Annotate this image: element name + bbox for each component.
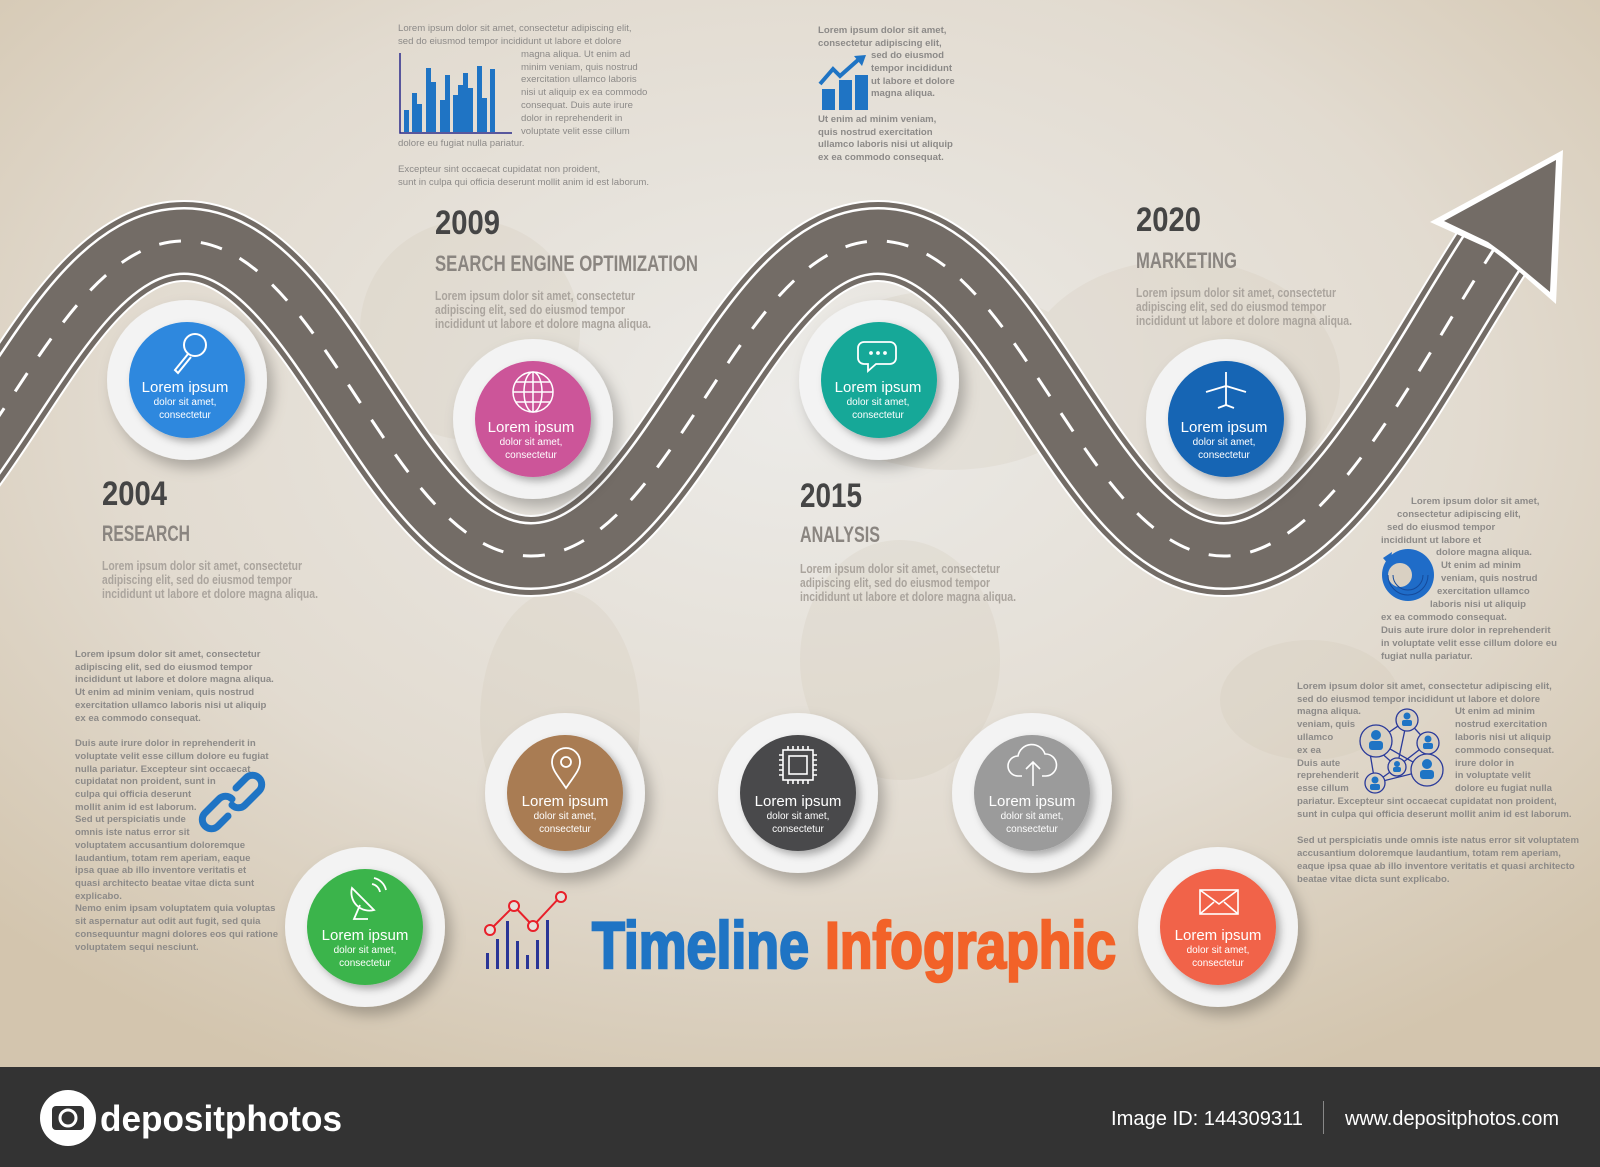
text block: right with pie icon: consectetur adipiscing elit, xyxy=(1397,509,1521,520)
circle: brown location: Lorem ipsum xyxy=(522,793,608,810)
text block: right lower with network icon: sunt in culpa qui officia deserunt mollit anim id est laborum. xyxy=(1297,809,1572,820)
text block: left lower with chain icon: voluptatem accusantium doloremque xyxy=(75,840,245,851)
circle: orange mail xyxy=(1138,847,1298,1007)
text block: top right with growth icon: Lorem ipsum dolor sit amet, xyxy=(818,25,947,36)
text block: left lower with chain icon: Nemo enim ipsam voluptatem quia voluptas xyxy=(75,903,275,914)
text block: top with bar chart xyxy=(398,23,649,188)
text block: right with pie icon: sed do eiusmod tempor xyxy=(1387,522,1495,533)
circle: teal analysis xyxy=(799,300,959,460)
text block: right with pie icon: Duis aute irure dolor in reprehenderit xyxy=(1381,625,1551,636)
circle: pink seo: consectetur xyxy=(505,450,558,461)
text block: right lower with network icon: dolore eu fugiat nulla xyxy=(1455,783,1553,794)
text block: left lower with chain icon: adipiscing elit, sed do eiusmod tempor xyxy=(75,662,253,673)
circle: dark chip: Lorem ipsum xyxy=(755,793,841,810)
icon: chain link xyxy=(202,775,262,829)
circle: teal analysis: dolor sit amet, xyxy=(847,397,909,408)
icon: satellite dish xyxy=(351,878,386,919)
text block: top right with growth icon: tempor incididunt xyxy=(871,63,953,74)
icon: bar chart xyxy=(400,53,512,133)
text block: top with bar chart: consequat. Duis aute irure xyxy=(521,100,633,111)
icon: chip xyxy=(779,746,817,784)
text block: top with bar chart: exercitation ullamco laboris xyxy=(521,74,637,85)
text block: right lower with network icon: Sed ut perspiciatis unde omnis iste natus error sit voluptatem xyxy=(1297,835,1579,846)
text block: right lower with network icon: beatae vitae dicta sunt explicabo. xyxy=(1297,874,1450,885)
text block: right lower with network icon: accusantium doloremque laudantium, totam rem aperiam, xyxy=(1297,848,1561,859)
text block: left lower with chain icon: consequuntur magni dolores eos qui ratione xyxy=(75,929,278,940)
milestone 2020 text: MARKETING xyxy=(1136,248,1237,273)
circle: dark chip xyxy=(718,713,878,873)
icon: network xyxy=(1360,709,1443,793)
text block: left lower with chain icon: ex ea commodo consequat. xyxy=(75,713,201,724)
text block: right with pie icon: exercitation ullamco xyxy=(1437,586,1530,597)
text block: right lower with network icon xyxy=(1297,681,1579,885)
milestone 2004 text: 2004 xyxy=(102,475,167,513)
milestone 2004 text: incididunt ut labore et dolore magna aliqua. xyxy=(102,587,318,601)
text block: top with bar chart: Excepteur sint occaecat cupidatat non proident, xyxy=(398,164,600,175)
circle: dark chip: dolor sit amet, xyxy=(767,811,829,822)
text block: left lower with chain icon: incididunt ut labore et dolore magna aliqua. xyxy=(75,674,274,685)
text block: left lower with chain icon: sit aspernatur aut odit aut fugit, sed quia xyxy=(75,916,261,927)
circle: green satellite xyxy=(285,847,445,1007)
milestone 2004 text: RESEARCH xyxy=(102,521,190,546)
circle: green satellite: consectetur xyxy=(339,958,392,969)
circle: orange mail: consectetur xyxy=(1192,958,1245,969)
text block: left lower with chain icon: laudantium, totam rem aperiam, eaque xyxy=(75,853,250,864)
text block: top right with growth icon: ut labore et dolore xyxy=(871,76,955,87)
text block: top right with growth icon: ullamco laboris nisi ut aliquip xyxy=(818,139,953,150)
circle: teal analysis: consectetur xyxy=(852,410,905,421)
text block: left lower with chain icon: Ut enim ad minim veniam, quis nostrud xyxy=(75,687,254,698)
milestone 2004 text: adipiscing elit, sed do eiusmod tempor xyxy=(102,573,292,587)
circle: brown location xyxy=(485,713,645,873)
circle: navy marketing: consectetur xyxy=(1198,450,1251,461)
text block: left lower with chain icon: quasi architecto beatae vitae dicta sunt xyxy=(75,878,255,889)
text block: top with bar chart: dolore eu fugiat nulla pariatur. xyxy=(398,138,524,149)
circle: blue research xyxy=(107,300,267,460)
text block: top right with growth icon: consectetur adipiscing elit, xyxy=(818,38,942,49)
text block: left lower with chain icon: Sed ut perspiciatis unde xyxy=(75,814,186,825)
text block: left lower with chain icon: culpa qui officia deserunt xyxy=(75,789,192,800)
milestone 2015 text: ANALYSIS xyxy=(800,522,880,547)
faint world map xyxy=(360,220,1400,850)
milestone 2015 text: 2015 xyxy=(800,477,862,515)
text block: left lower with chain icon: omnis iste natus error sit xyxy=(75,827,190,838)
text block: right lower with network icon: magna aliqua. xyxy=(1297,706,1361,717)
text block: left lower with chain icon: ipsa quae ab illo inventore veritatis et xyxy=(75,865,247,876)
circle: pink seo: dolor sit amet, xyxy=(500,437,562,448)
circle: gray cloud: Lorem ipsum xyxy=(989,793,1075,810)
text block: right lower with network icon: Ut enim ad minim xyxy=(1455,706,1535,717)
icon: radial chart xyxy=(1382,549,1434,601)
text block: top right with growth icon: magna aliqua. xyxy=(871,88,935,99)
road xyxy=(0,240,1500,556)
icon: cloud upload xyxy=(1008,745,1056,786)
text block: right with pie icon: incididunt ut labore et xyxy=(1381,535,1482,546)
circle: navy marketing: dolor sit amet, xyxy=(1193,437,1255,448)
text block: left lower with chain icon: exercitation ullamco laboris nisi ut aliquip xyxy=(75,700,267,711)
text block: right with pie icon: dolore magna aliqua. xyxy=(1436,547,1532,558)
icon: pin xyxy=(552,748,580,788)
milestone 2020 text: adipiscing elit, sed do eiusmod tempor xyxy=(1136,300,1326,314)
circle: gray cloud: dolor sit amet, xyxy=(1001,811,1063,822)
text block: left lower with chain icon: Duis aute irure dolor in reprehenderit in xyxy=(75,738,256,749)
text block: right lower with network icon: in voluptate velit xyxy=(1455,770,1532,781)
text block: left lower with chain icon: voluptatem sequi nesciunt. xyxy=(75,942,199,953)
title: Timeline xyxy=(592,908,809,982)
icon: magnifier xyxy=(175,334,206,373)
circle: teal analysis: Lorem ipsum xyxy=(835,379,921,396)
icon: growth chart xyxy=(820,55,868,110)
circle: blue research: consectetur xyxy=(159,410,212,421)
circle: orange mail: dolor sit amet, xyxy=(1187,945,1249,956)
circle: gray cloud xyxy=(952,713,1112,873)
icon: title chart xyxy=(485,892,566,969)
text block: left lower with chain icon: nulla pariatur. Excepteur sint occaecat xyxy=(75,764,251,775)
milestone 2015 text xyxy=(800,477,1016,604)
text block: right lower with network icon: Lorem ipsum dolor sit amet, consectetur adipiscing elit, xyxy=(1297,681,1552,692)
text block: top with bar chart: sunt in culpa qui officia deserunt mollit anim id est laborum. xyxy=(398,177,649,188)
text block: left lower with chain icon: mollit anim id est laborum. xyxy=(75,802,197,813)
text block: right lower with network icon: eaque ipsa quae ab illo inventore veritatis et quasi architecto xyxy=(1297,861,1575,872)
text block: top with bar chart: dolor in reprehenderit in xyxy=(521,113,622,124)
text block: top with bar chart: minim veniam, quis nostrud xyxy=(521,62,638,73)
text block: right with pie icon: in voluptate velit esse cillum dolore eu xyxy=(1381,638,1557,649)
arrow head xyxy=(1430,150,1563,304)
text block: left lower with chain icon: Lorem ipsum dolor sit amet, consectetur xyxy=(75,649,261,660)
milestone 2009 text: 2009 xyxy=(435,204,500,242)
icon: globe xyxy=(513,372,553,412)
text block: left lower with chain icon: cupidatat non proident, sunt in xyxy=(75,776,216,787)
milestone 2009 text: adipiscing elit, sed do eiusmod tempor xyxy=(435,303,625,317)
text block: top right with growth icon: quis nostrud exercitation xyxy=(818,127,933,138)
text block: right with pie icon: laboris nisi ut aliquip xyxy=(1430,599,1526,610)
text block: right lower with network icon: laboris nisi ut aliquip xyxy=(1455,732,1551,743)
milestone 2009 text xyxy=(435,204,698,331)
circle: navy marketing: Lorem ipsum xyxy=(1181,419,1267,436)
text block: left lower with chain icon: voluptate velit esse cillum dolore eu fugiat xyxy=(75,751,269,762)
milestone 2015 text: adipiscing elit, sed do eiusmod tempor xyxy=(800,576,990,590)
milestone 2020 text: incididunt ut labore et dolore magna aliqua. xyxy=(1136,314,1352,328)
text block: right lower with network icon: nostrud exercitation xyxy=(1455,719,1547,730)
title: Infographic xyxy=(825,908,1116,982)
text block: top with bar chart: voluptate velit esse cillum xyxy=(521,126,630,137)
milestone 2004 text: Lorem ipsum dolor sit amet, consectetur xyxy=(102,559,302,573)
footer logo: depositphotos xyxy=(100,1098,342,1139)
text block: right lower with network icon: ullamco xyxy=(1297,732,1333,743)
text block: right lower with network icon: commodo consequat. xyxy=(1455,745,1554,756)
milestone 2020 text xyxy=(1136,201,1352,328)
circle: blue research: dolor sit amet, xyxy=(154,397,216,408)
circle: dark chip: consectetur xyxy=(772,824,825,835)
circle: brown location: dolor sit amet, xyxy=(534,811,596,822)
text block: right lower with network icon: irure dolor in xyxy=(1455,758,1514,769)
text block: left lower with chain icon xyxy=(75,649,278,953)
icon: plane xyxy=(1206,372,1246,408)
milestone 2009 text: incididunt ut labore et dolore magna aliqua. xyxy=(435,317,651,331)
text block: right lower with network icon: Duis aute xyxy=(1297,758,1340,769)
text block: right lower with network icon: esse cillum xyxy=(1297,783,1349,794)
icon: envelope xyxy=(1200,890,1238,914)
text block: top right with growth icon xyxy=(818,25,955,163)
text block: right with pie icon: veniam, quis nostrud xyxy=(1441,573,1538,584)
milestone 2020 text: 2020 xyxy=(1136,201,1201,239)
footer image id: www.depositphotos.com xyxy=(1344,1108,1559,1130)
text block: top with bar chart: magna aliqua. Ut enim ad xyxy=(521,49,630,60)
circle: green satellite: dolor sit amet, xyxy=(334,945,396,956)
milestone 2015 text: incididunt ut labore et dolore magna aliqua. xyxy=(800,590,1016,604)
circle: green satellite: Lorem ipsum xyxy=(322,927,408,944)
text block: top right with growth icon: sed do eiusmod xyxy=(871,50,944,61)
icon: chat xyxy=(858,342,896,371)
text block: right with pie icon: Lorem ipsum dolor sit amet, xyxy=(1411,496,1540,507)
circle: orange mail: Lorem ipsum xyxy=(1175,927,1261,944)
circle: pink seo xyxy=(453,339,613,499)
text block: top with bar chart: Lorem ipsum dolor sit amet, consectetur adipiscing elit, xyxy=(398,23,632,34)
text block: top with bar chart: sed do eiusmod tempor incididunt ut labore et dolore xyxy=(398,36,621,47)
text block: right lower with network icon: ex ea xyxy=(1297,745,1322,756)
footer bar xyxy=(0,1067,1600,1167)
milestone 2009 text: Lorem ipsum dolor sit amet, consectetur xyxy=(435,289,635,303)
circle: gray cloud: consectetur xyxy=(1006,824,1059,835)
milestone 2015 text: Lorem ipsum dolor sit amet, consectetur xyxy=(800,562,1000,576)
text block: top right with growth icon: ex ea commodo consequat. xyxy=(818,152,944,163)
milestone 2020 text: Lorem ipsum dolor sit amet, consectetur xyxy=(1136,286,1336,300)
text block: right lower with network icon: sed do eiusmod tempor incididunt ut labore et dolore xyxy=(1297,694,1540,705)
circle: brown location: consectetur xyxy=(539,824,592,835)
circle: navy marketing xyxy=(1146,339,1306,499)
milestone 2009 text: SEARCH ENGINE OPTIMIZATION xyxy=(435,251,698,276)
footer image id xyxy=(1111,1101,1559,1134)
text block: right with pie icon xyxy=(1381,496,1557,662)
text block: right with pie icon: fugiat nulla pariatur. xyxy=(1381,651,1473,662)
text block: right with pie icon: Ut enim ad minim xyxy=(1441,560,1521,571)
footer logo xyxy=(40,1090,342,1146)
circle: blue research: Lorem ipsum xyxy=(142,379,228,396)
circle: pink seo: Lorem ipsum xyxy=(488,419,574,436)
text block: top right with growth icon: Ut enim ad minim veniam, xyxy=(818,114,937,125)
title xyxy=(592,908,1116,982)
text block: right with pie icon: ex ea commodo consequat. xyxy=(1381,612,1507,623)
text block: top with bar chart: nisi ut aliquip ex ea commodo xyxy=(521,87,647,98)
text block: right lower with network icon: veniam, quis xyxy=(1297,719,1355,730)
milestone 2004 text xyxy=(102,475,318,601)
text block: left lower with chain icon: explicabo. xyxy=(75,891,122,902)
text block: right lower with network icon: reprehenderit xyxy=(1297,770,1360,781)
footer image id: Image ID: 144309311 xyxy=(1111,1108,1303,1130)
text block: right lower with network icon: pariatur. Excepteur sint occaecat cupidatat non proident, xyxy=(1297,796,1557,807)
